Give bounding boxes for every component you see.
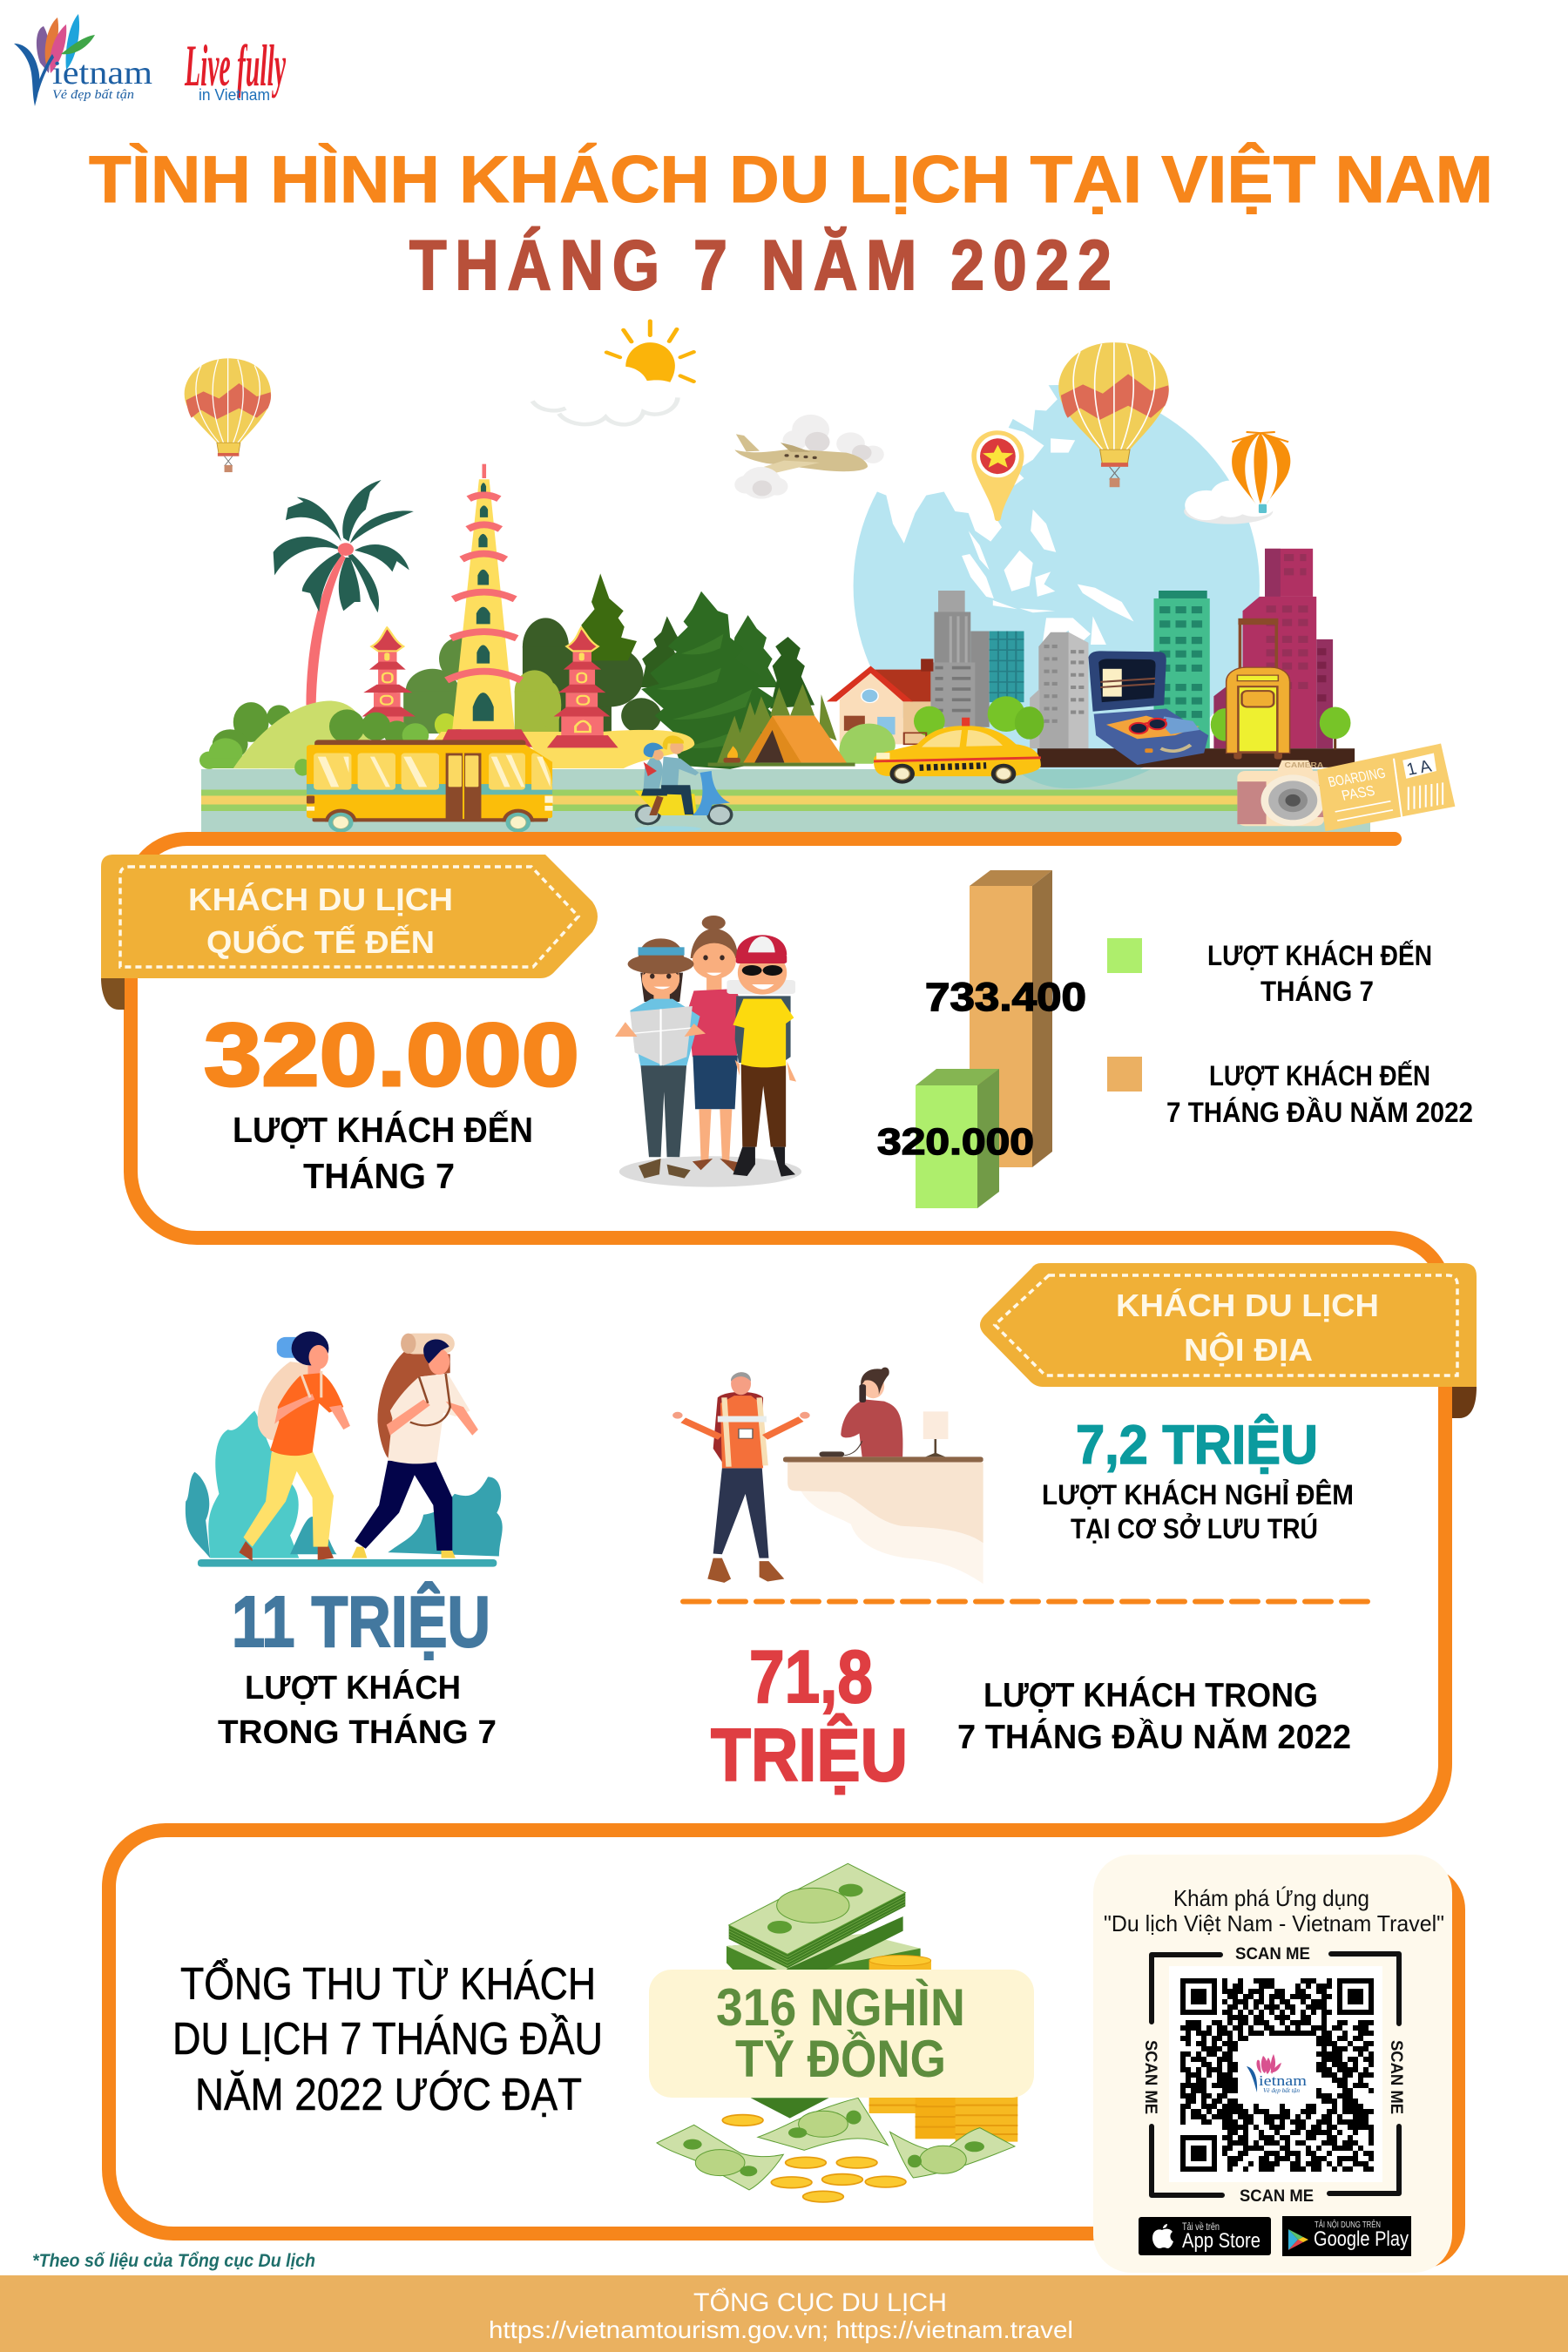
- app QR card: [1093, 1855, 1465, 2273]
- revenue caption: DU LỊCH 7 THÁNG ĐẦU: [172, 2013, 603, 2065]
- globe with continents: [828, 382, 1260, 787]
- central tower: [439, 464, 532, 747]
- QR centre logo: ietnam: [1259, 2072, 1307, 2089]
- stat caption: LƯỢT KHÁCH: [245, 1668, 461, 1707]
- scan frame: [1141, 1945, 1405, 2206]
- bar: July: [916, 1069, 999, 1208]
- hiker: woman: [239, 1331, 350, 1561]
- logo: Vietnam: Vẻ đẹp bất tận: [52, 88, 134, 102]
- tourist: right man with cap: [727, 935, 796, 1177]
- stat caption: [218, 1668, 497, 1751]
- taxi: [874, 718, 1041, 784]
- scan frame: SCAN ME: [1141, 2040, 1159, 2114]
- stat: 71,8 triệu: 71,8: [749, 1636, 873, 1719]
- balloon: orange striped: [1228, 432, 1293, 513]
- icon: two hikers: [186, 1331, 503, 1567]
- App Store button: Tải về trên: [1182, 2220, 1220, 2233]
- title: [89, 142, 1493, 305]
- open suitcase: [1088, 651, 1208, 765]
- sun: [532, 321, 693, 424]
- city and luggage: [734, 342, 1455, 831]
- value: 320.000: 320.000: [877, 1121, 1034, 1163]
- buildings: [930, 549, 1333, 748]
- stat caption: overnight: LƯỢT KHÁCH NGHỈ ĐÊM: [1042, 1479, 1354, 1511]
- stat caption: seven months: [957, 1676, 1351, 1756]
- footer band: [0, 2275, 1568, 2352]
- reception desk: [783, 1368, 983, 1584]
- callout: revenue value: TỶ ĐỒNG: [735, 2030, 946, 2088]
- bushes by bus: [294, 709, 429, 776]
- stat caption: THÁNG 7: [303, 1156, 455, 1196]
- tourist man: [672, 1372, 810, 1583]
- stat caption: seven months: LƯỢT KHÁCH TRONG: [983, 1676, 1318, 1714]
- scan frame: SCAN ME: [1387, 2040, 1405, 2114]
- revenue caption: TỔNG THU TỪ KHÁCH: [180, 1958, 596, 2010]
- legend: LƯỢT KHÁCH ĐẾN: [1209, 1060, 1430, 1092]
- panel: tourism revenue: [172, 1855, 1465, 2273]
- stat caption: overnight: [1042, 1479, 1354, 1544]
- yellow luggage: [1227, 618, 1290, 759]
- panel: domestic visitors: [186, 1263, 1477, 1797]
- loose banknotes: [657, 2098, 1015, 2190]
- app heading: "Du lịch Việt Nam - Vietnam Travel": [1104, 1910, 1444, 1936]
- stat: 11 triệu: 11 TRIỆU: [232, 1581, 490, 1662]
- plane and clouds: [734, 415, 884, 474]
- small cloud: [734, 467, 787, 499]
- banner: international: QUỐC TẾ ĐẾN: [206, 923, 435, 960]
- road: [201, 769, 1370, 832]
- title: THÁNG 7 NĂM 2022: [409, 226, 1112, 305]
- panel: international visitors: [101, 855, 1473, 1208]
- banner: international: [101, 855, 598, 1010]
- bus: [307, 740, 553, 833]
- map pin: [971, 430, 1024, 521]
- ground: [1037, 748, 1355, 767]
- hill and left bushes: [199, 701, 375, 769]
- camera: [1237, 760, 1325, 826]
- revenue caption: [172, 1958, 603, 2120]
- stat: 7,2 triệu: 7,2 TRIỆU: [1076, 1414, 1318, 1476]
- loose coins: [722, 2115, 906, 2202]
- palm tree: [274, 480, 414, 705]
- boarding pass: BOARDING: [1327, 765, 1387, 790]
- QR centre logo: Vẻ đẹp bất tận: [1263, 2087, 1301, 2094]
- bar chart: [877, 870, 1086, 1208]
- banner: domestic: KHÁCH DU LỊCH: [1116, 1288, 1379, 1323]
- pine forest: [579, 573, 837, 769]
- nature and temple: [185, 321, 855, 833]
- title: TÌNH HÌNH KHÁCH DU LỊCH TẠI VIỆT NAM: [89, 142, 1493, 217]
- stat caption: TRONG THÁNG 7: [218, 1713, 497, 1751]
- boarding pass: [1317, 744, 1455, 831]
- logo: Vietnam: [14, 14, 152, 106]
- sand: [432, 730, 694, 768]
- stat: 71,8 triệu: [711, 1636, 908, 1797]
- App Store button: [1139, 2217, 1271, 2255]
- app heading: [1104, 1885, 1444, 1936]
- legend: LƯỢT KHÁCH ĐẾN: [1207, 940, 1432, 971]
- Google Play button: Google Play: [1314, 2227, 1409, 2251]
- scan frame: SCAN ME: [1240, 2187, 1314, 2206]
- stat caption: seven months: 7 THÁNG ĐẦU NĂM 2022: [957, 1718, 1351, 1756]
- logo: Live fully: [185, 32, 286, 104]
- tourist: middle woman: [687, 916, 746, 1172]
- tent and campfire: [708, 716, 855, 767]
- scan frame: SCAN ME: [1235, 1945, 1310, 1963]
- tourist: left woman with map: [615, 938, 706, 1179]
- balloon: small: [185, 358, 271, 472]
- stat caption: [233, 1110, 533, 1196]
- boarding pass: 1 A: [1404, 756, 1434, 779]
- QR code: [1169, 1966, 1382, 2182]
- logo: Live fully: in Vietnam: [199, 86, 270, 104]
- footnote: *Theo số liệu của Tổng cục Du lịch: [32, 2251, 315, 2271]
- boarding pass: PASS: [1340, 782, 1376, 803]
- callout: revenue value: 316 NGHÌN: [716, 1978, 965, 2037]
- left small pagoda: [362, 627, 416, 727]
- value: 733.400: 733.400: [925, 975, 1086, 1019]
- coin stacks: [869, 2097, 1017, 2142]
- banner: domestic: [980, 1263, 1477, 1418]
- stat: 71,8 triệu: TRIỆU: [711, 1713, 908, 1797]
- logo: Vietnam: ietnam: [52, 55, 152, 91]
- camera: CAMERA: [1284, 761, 1324, 769]
- dark bushes behind temple: [403, 618, 661, 736]
- callout: revenue value: [649, 1970, 1034, 2098]
- icon: three tourists: [615, 916, 801, 1187]
- orange frame line for all sections: [109, 839, 1445, 2234]
- revenue caption: NĂM 2022 ƯỚC ĐẠT: [195, 2070, 582, 2120]
- legend: [1107, 938, 1473, 1128]
- icon: tourist at hotel reception: [672, 1368, 983, 1584]
- bar: 7 months: [970, 870, 1052, 1167]
- footer band: TỔNG CỤC DU LỊCH: [693, 2288, 947, 2317]
- banner: international: KHÁCH DU LỊCH: [188, 882, 453, 917]
- Google Play button: [1282, 2216, 1411, 2256]
- footer band: https://vietnamtourism.gov.vn; https://vietnam.travel: [489, 2316, 1073, 2343]
- legend: THÁNG 7: [1260, 976, 1374, 1007]
- legend: 7 THÁNG ĐẦU NĂM 2022: [1166, 1097, 1473, 1128]
- text: Live fully: [185, 32, 286, 98]
- cloud: [1184, 480, 1275, 524]
- balloon: large: [1058, 342, 1169, 487]
- Google Play button: TẢI NỘI DUNG TRÊN: [1315, 2219, 1381, 2230]
- house: [827, 659, 933, 744]
- icon: money and coins: [657, 1863, 1017, 2202]
- scooter couple: [634, 735, 732, 832]
- trees: [839, 696, 1351, 764]
- QR centre logo: [1247, 2054, 1307, 2094]
- app heading: Khám phá Ứng dụng: [1173, 1885, 1369, 1911]
- right small pagoda: [547, 627, 618, 747]
- hero illustration: [185, 321, 1455, 833]
- banner: domestic: NỘI ĐỊA: [1184, 1331, 1313, 1368]
- banknote stacks: [727, 1863, 931, 2119]
- hiker: man: [351, 1334, 478, 1558]
- stat caption: overnight: TẠI CƠ SỞ LƯU TRÚ: [1071, 1513, 1318, 1544]
- stat caption: LƯỢT KHÁCH ĐẾN: [233, 1110, 533, 1150]
- App Store button: App Store: [1182, 2229, 1260, 2253]
- stat: 320.000: 320.000: [204, 1005, 579, 1105]
